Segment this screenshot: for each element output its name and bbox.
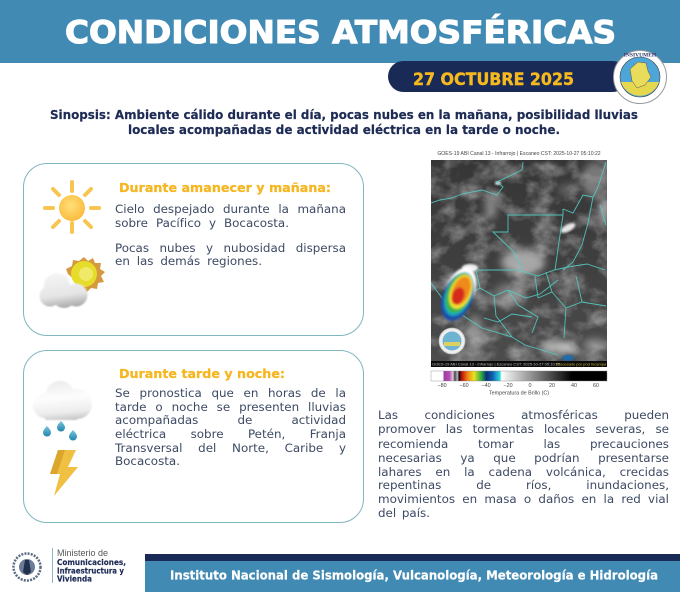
title: CONDICIONES ATMOSFÉRICAS [65, 13, 616, 51]
text: recommendations: recomienda tomar las precauciones [378, 436, 669, 450]
text: afternoon forecast: Bocacosta. [115, 454, 180, 468]
text: morning forecast: sobre Pacífico y Bocacosta. [115, 216, 289, 230]
logo: ministry name: Vivienda [57, 574, 92, 584]
chart: temperature colour bar: −20 [503, 383, 513, 389]
text: recommendations: movimientos en masa o daños en la red vial [378, 492, 669, 506]
logo: INSIVUMEH seal [613, 50, 667, 104]
text: morning forecast: Pocas nubes y nubosidad dispersa [115, 241, 346, 255]
icon: lightning bolt [50, 450, 78, 496]
chart: temperature colour bar [430, 370, 608, 396]
panel: afternoon [23, 350, 364, 523]
heading: afternoon: Durante tarde y noche: [119, 366, 285, 381]
chart: temperature colour bar: 0 [528, 383, 532, 389]
text: afternoon forecast: tarde o noche se presenten lluvias [115, 400, 346, 414]
text: morning forecast: en las demás regiones. [115, 254, 262, 268]
footer institute name: Instituto Nacional de Sismología, Vulcanología, Meteorología e Hidrología [170, 568, 658, 582]
satellite image caption: GOES-19 ABI Canal 13 - Infrarrojo | Escaneo CST: 2025-10-27 05:10:22 [437, 151, 601, 157]
panel: morning [23, 163, 364, 336]
text: recommendations: lahares en la cadena volcánica, crecidas [378, 464, 669, 478]
synopsis text: Sinopsis: Ambiente cálido durante el día, pocas nubes en la mañana, posibilidad lluvias [50, 107, 638, 122]
text: afternoon forecast [114, 386, 346, 468]
chart: temperature colour bar: −40 [481, 383, 491, 389]
chart: satellite map: Procesado por pnd Incampa [556, 362, 607, 366]
date pill [388, 61, 618, 92]
synopsis text: locales acompañadas de actividad eléctrica en la tarde o noche. [128, 122, 560, 137]
chart: temperature colour bar: −80 [437, 383, 447, 389]
text: afternoon forecast: acompañadas de actividad [115, 413, 346, 427]
icon: rain cloud [34, 381, 92, 440]
text: recommendations: promover las tormentas locales severas, se [378, 422, 669, 436]
icon: sun behind cloud [39, 257, 105, 309]
icon: sun [43, 180, 101, 234]
date pill: 27 OCTUBRE 2025 [413, 70, 574, 89]
text: recommendations [378, 408, 669, 520]
chart: temperature colour bar: 40 [571, 383, 577, 389]
logo: Guatemala coat of arms [12, 552, 42, 582]
text: afternoon forecast: Se pronostica que en horas de la [115, 386, 346, 400]
text: recommendations: del país. [378, 506, 430, 520]
heading: morning: Durante amanecer y mañana: [119, 180, 331, 195]
logo: ministry name [52, 548, 126, 584]
chart: temperature colour bar: Temperatura de Brillo (C) [489, 390, 549, 396]
chart: temperature colour bar: −60 [459, 383, 469, 389]
text: afternoon forecast: Transversal del Norte, Caribe y [115, 441, 346, 455]
logo: INSIVUMEH seal: INSIVUMEH [624, 52, 657, 58]
header banner [0, 0, 680, 63]
chart: temperature colour bar: 60 [593, 383, 599, 389]
logo: ministry name: Comunicaciones, [57, 558, 126, 567]
chart: satellite map [431, 160, 607, 367]
text: recommendations: necesarias ya que podrían presentarse [378, 450, 669, 464]
chart: satellite map: GOES-19 ABI Canal 13 - Infrarrojo | Escaneo CST: 2025-10-27 05:10:22 [432, 362, 561, 366]
chart: temperature colour bar: 20 [549, 383, 555, 389]
text: recommendations: Las condiciones atmosféricas pueden [378, 408, 669, 422]
logo: ministry name: Ministerio de [57, 548, 108, 558]
synopsis text [50, 107, 638, 137]
logo: ministry name: Infraestructura y [57, 566, 124, 576]
text: recommendations: repentinas de ríos, inundaciones, [378, 478, 669, 492]
footer band [145, 554, 680, 592]
text: morning forecast [115, 202, 346, 268]
text: afternoon forecast: eléctrica sobre Petén, Franja [115, 427, 346, 441]
text: morning forecast: Cielo despejado durante la mañana [115, 202, 346, 216]
